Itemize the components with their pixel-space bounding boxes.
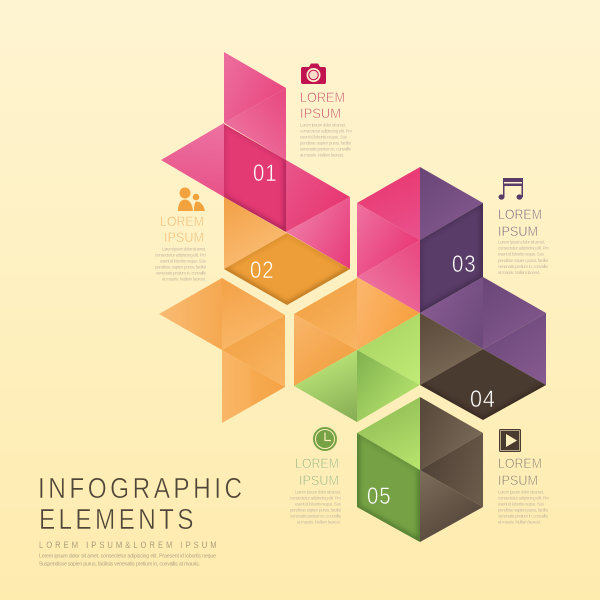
text block: purple label: esent id lobortis neque. Sus	[498, 252, 545, 256]
text block: green label: venenatis pretium in, convallis	[290, 514, 342, 518]
panel: orange triangle cluster	[159, 278, 285, 423]
text block: orange label: IPSUM	[164, 229, 204, 245]
text block: brown label: LOREM	[498, 455, 542, 471]
text block: pink label	[300, 89, 353, 158]
text block: pink label: pendisse sapien purus, facilisi	[300, 140, 351, 146]
text block: purple label: venenatis pretium in, convallis	[498, 264, 549, 269]
text block: pink label: Lorem ipsum dolor sit amet,	[300, 122, 346, 128]
text block: green label: at mauris. Nullam laoreet.	[297, 520, 341, 524]
text block: pink label: esent id lobortis neque. Sus	[300, 134, 348, 140]
text block: purple label: LOREM	[498, 206, 542, 222]
text block: purple label: pendisse sapien purus, facilisi	[498, 258, 548, 263]
text block: orange label: LOREM	[160, 213, 204, 229]
text block: green label: consectetur adipiscing elit. Pro	[290, 496, 342, 500]
number 01: 01	[253, 159, 277, 186]
text block: purple label: consectetur adipiscing elit. Pro	[498, 246, 550, 250]
icon: music note	[498, 178, 523, 200]
description text: Suspendisse sapien purus, facilisis venenatis pretium in, convallis at mauris.	[39, 562, 200, 568]
panel: pink block 01	[161, 52, 350, 269]
text block: brown label: pendisse sapien purus, facilisi	[498, 508, 548, 512]
number 02: 02	[250, 256, 274, 283]
text block: orange label: venenatis pretium in, convallis	[156, 270, 207, 276]
text block: green label: Lorem ipsum dolor sit amet,	[295, 490, 341, 494]
text block: purple label: at mauris. Nullam laoreet.	[498, 270, 540, 275]
text block: brown label: Lorem ipsum dolor sit amet,	[498, 490, 544, 494]
description text: Lorem ipsum dolor sit amet, consectetur adipiscing elit. Praesent id lobortis neque	[39, 554, 216, 560]
text block: purple label	[498, 206, 550, 275]
panel: green and brown block 05	[357, 397, 483, 542]
subtitle: LOREM IPSUM&LOREM IPSUM	[39, 539, 217, 550]
number 05: 05	[367, 482, 391, 509]
description text	[39, 554, 216, 568]
text block: green label: LOREM	[295, 455, 339, 471]
panel: orange block 02	[224, 197, 350, 305]
number 04: 04	[470, 385, 496, 412]
icon: clock	[313, 427, 337, 451]
text block: pink label: LOREM	[300, 89, 345, 105]
text block: green label: IPSUM	[299, 472, 339, 488]
panel: purple and brown block 04	[420, 277, 546, 420]
icon: people	[178, 188, 205, 211]
text block: brown label: consectetur adipiscing elit. Pro	[498, 496, 550, 500]
text block: purple label: Lorem ipsum dolor sit amet,	[498, 240, 545, 244]
text block: orange label: esent id lobortis neque. Sus	[160, 258, 207, 264]
title: INFOGRAPHIC	[38, 472, 242, 504]
text block: orange label: consectetur adipiscing elit. Pro	[155, 252, 207, 258]
text block: pink label: consectetur adipiscing elit. Pro	[300, 128, 353, 134]
text block: brown label	[498, 455, 550, 524]
text block: purple label: IPSUM	[498, 223, 538, 239]
text block: green label: esent id lobortis neque. Sus	[295, 502, 342, 506]
text block: pink label: venenatis pretium in, convallis	[300, 146, 352, 152]
text block: orange label: at mauris. Nullam laoreet.	[162, 276, 206, 282]
text block: brown label: venenatis pretium in, convallis	[498, 514, 549, 518]
title	[38, 472, 242, 535]
text block: orange label: Lorem ipsum dolor sit amet,	[162, 246, 206, 252]
text block: brown label: esent id lobortis neque. Sus	[498, 502, 545, 506]
number 03: 03	[452, 250, 476, 277]
text block: pink label: at mauris. Nullam laoreet.	[300, 152, 344, 158]
panel: pink and purple block 03	[357, 167, 483, 313]
icon: play button	[499, 429, 521, 452]
text block: green label	[290, 455, 342, 524]
text block: pink label: IPSUM	[300, 105, 341, 121]
text block: orange label: pendisse sapien purus, facilisi	[155, 264, 206, 270]
panel: orange and green middle cluster	[294, 277, 420, 422]
text block: brown label: IPSUM	[498, 472, 538, 488]
text block: green label: pendisse sapien purus, facilisi	[290, 508, 341, 512]
text block: orange label	[155, 213, 207, 282]
text block: brown label: at mauris. Nullam laoreet.	[498, 520, 541, 524]
icon: camera	[301, 64, 326, 84]
title: ELEMENTS	[39, 503, 194, 535]
